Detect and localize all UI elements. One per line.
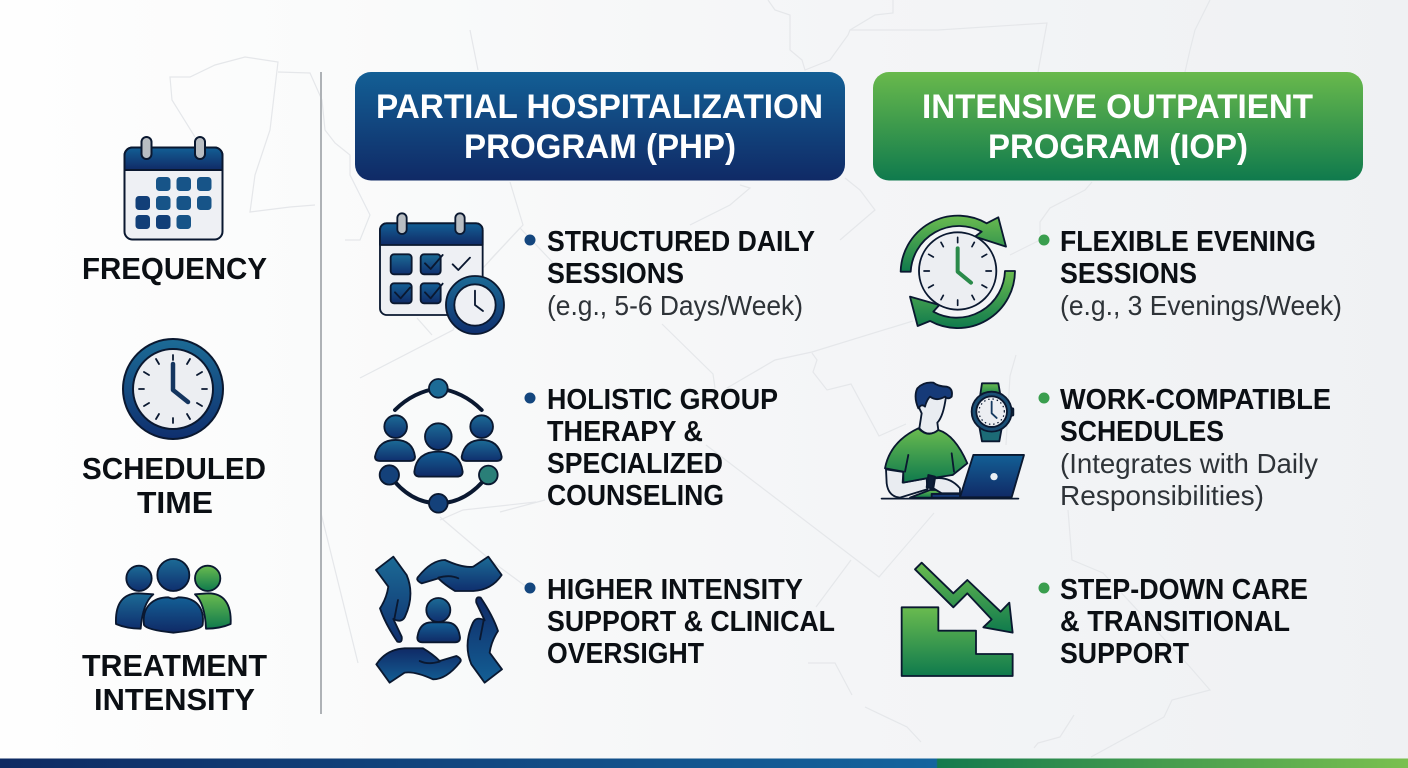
bullet text: structured daily sessions: SESSIONS [547, 258, 684, 290]
bullet text: holistic group therapy [524, 384, 778, 512]
panel: PHP column [355, 72, 845, 683]
bullet text: flexible evening sessions: SESSIONS [1060, 258, 1197, 290]
icon: calendar with clock [380, 213, 504, 334]
bullet text: holistic group therapy: SPECIALIZED [547, 448, 723, 480]
label: treatment intensity [82, 648, 267, 717]
icon: treatment intensity people [116, 559, 231, 633]
divider [320, 72, 322, 714]
label: scheduled time: TIME [137, 485, 213, 520]
label: frequency: FREQUENCY [82, 251, 267, 286]
bullet text: holistic group therapy: HOLISTIC GROUP [547, 384, 778, 416]
bullet text: work-compatible schedules: Responsibilities) [1060, 480, 1264, 511]
heading: PHP [355, 72, 845, 180]
bullet text: work-compatible schedules: WORK-COMPATIBLE [1060, 384, 1331, 416]
bullet text: work-compatible schedules: (Integrates with Daily [1060, 448, 1318, 479]
panel: row labels [82, 137, 267, 717]
icon: step-down stairs with arrow [902, 563, 1013, 676]
label: scheduled time [82, 451, 266, 520]
bullet text: structured daily sessions: (e.g., 5-6 Days/Week) [547, 290, 803, 321]
heading: PHP: PARTIAL HOSPITALIZATION [376, 88, 823, 126]
bullet text: higher intensity support: OVERSIGHT [547, 638, 704, 670]
heading: PHP: PROGRAM (PHP) [464, 128, 736, 166]
bullet text: higher intensity support: HIGHER INTENSITY [547, 574, 803, 606]
icon: person at laptop with watch [882, 383, 1024, 499]
bottom colour bar [0, 758, 1408, 768]
bullet text: step-down care: STEP-DOWN CARE [1060, 574, 1308, 606]
bullet text: work-compatible schedules: SCHEDULES [1060, 416, 1224, 448]
bullet text: holistic group therapy: THERAPY & [547, 416, 703, 448]
label: scheduled time: SCHEDULED [82, 451, 266, 486]
heading: IOP: PROGRAM (IOP) [988, 128, 1248, 166]
bullet text: structured daily sessions: STRUCTURED DAILY [547, 226, 815, 258]
bullet text: step-down care: SUPPORT [1060, 638, 1189, 670]
bullet text: flexible evening sessions: FLEXIBLE EVENING [1060, 226, 1316, 258]
panel: IOP column [873, 72, 1363, 676]
bullet text: work-compatible schedules [1038, 384, 1331, 511]
bullet text: step-down care [1038, 574, 1308, 670]
bullet text: flexible evening sessions: (e.g., 3 Evenings/Week) [1060, 290, 1342, 321]
icon: supporting hands around person [376, 557, 502, 683]
label: treatment intensity: INTENSITY [94, 682, 255, 717]
bullet text: higher intensity support [524, 574, 835, 670]
bullet text: higher intensity support: SUPPORT & CLINICAL [547, 606, 835, 638]
bullet text: holistic group therapy: COUNSELING [547, 480, 724, 512]
bullet text: structured daily sessions [524, 226, 815, 321]
icon: scheduled time clock [123, 339, 223, 439]
icon: group therapy circle [375, 379, 502, 513]
heading: IOP: INTENSIVE OUTPATIENT [922, 88, 1313, 126]
bullet text: flexible evening sessions [1038, 226, 1342, 321]
bullet text: step-down care: & TRANSITIONAL [1060, 606, 1290, 638]
icon: clock with cycle arrows [901, 216, 1015, 328]
icon: frequency calendar [124, 137, 222, 240]
heading: IOP [873, 72, 1363, 180]
label: treatment intensity: TREATMENT [82, 648, 267, 683]
